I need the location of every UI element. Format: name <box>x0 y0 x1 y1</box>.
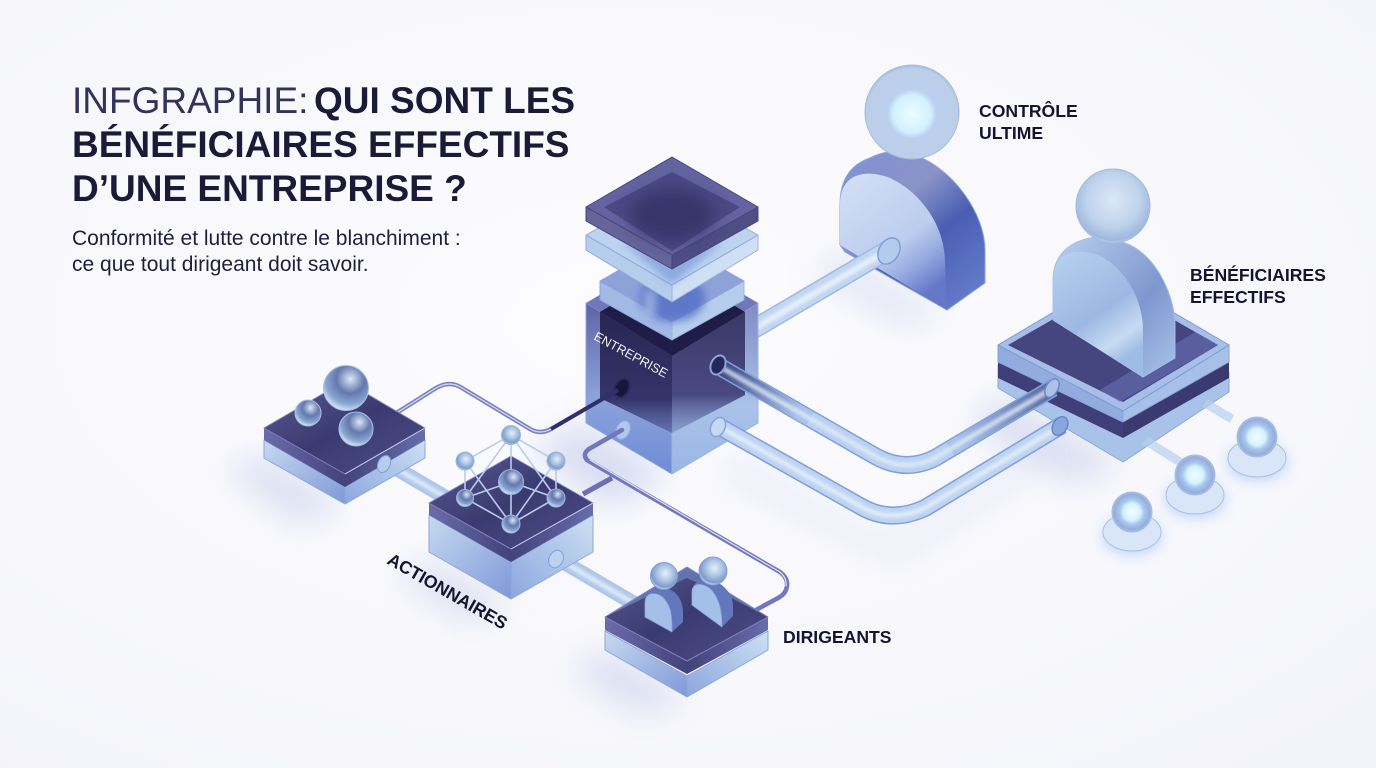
title: QUI SONT LES <box>314 80 575 121</box>
plate two <box>586 235 672 302</box>
title: BÉNÉFICIAIRES EFFECTIFS <box>72 124 569 165</box>
plate three <box>600 281 672 340</box>
body <box>1053 237 1175 377</box>
icon: ownership network <box>456 426 565 533</box>
label: contrôle ultime: ULTIME <box>979 123 1043 143</box>
dark core <box>600 312 672 433</box>
subtitle: ce que tout dirigeant doit savoir. <box>72 253 369 276</box>
connector: dirigeants lower pipe section <box>745 598 778 616</box>
figure: bénéficiaires effectifs person <box>1053 169 1175 377</box>
node: actionnaires left block <box>264 366 425 504</box>
subtitle: Conformité et lutte contre le blanchiment : <box>72 227 461 250</box>
label: contrôle ultime: CONTRÔLE <box>979 100 1078 121</box>
body <box>840 152 985 310</box>
socket <box>546 548 566 570</box>
connector: light tube left block to middle block <box>385 462 445 497</box>
glowing head <box>865 65 959 159</box>
label: dirigeants: DIRIGEANTS <box>783 627 892 647</box>
connector: light tube middle block to dirigeants block <box>560 560 635 604</box>
node: bénéficiaires effectifs platform <box>998 277 1229 462</box>
connector: middle block to cube short pipe <box>583 478 612 494</box>
cube glass sides <box>586 303 672 474</box>
icon: shareholder spheres <box>295 366 373 446</box>
connector: dark pipe into entreprise <box>551 390 618 429</box>
label: bénéficiaires effectifs: BÉNÉFICIAIRES <box>1190 264 1326 285</box>
sockets <box>611 376 633 400</box>
figure: contrôle ultime person <box>840 65 985 310</box>
node: entreprise stacked cube <box>586 157 758 474</box>
ground shadows <box>225 250 1123 715</box>
lid <box>586 207 672 269</box>
head <box>1076 169 1150 243</box>
title: D’UNE ENTREPRISE ? <box>72 168 467 209</box>
title: INFGRAPHIE: <box>72 80 319 121</box>
connector: entreprise to bénéficiaires tube upper <box>707 353 1062 465</box>
cube label: ENTREPRISE <box>592 328 671 381</box>
icon: glowing outcome nodes <box>1103 417 1286 552</box>
connector: dirigeants to entreprise thin pipe <box>585 430 787 598</box>
icon: two directors <box>645 557 733 632</box>
dark layer <box>998 362 1123 438</box>
connector: platform to outcome tubes <box>1145 403 1232 462</box>
connector: actionnaires to entreprise thin pipe <box>398 384 551 432</box>
socket <box>375 453 393 475</box>
lower glass <box>998 365 1229 462</box>
label: actionnaires: ACTIONNAIRES <box>384 549 511 633</box>
label: bénéficiaires effectifs: EFFECTIFS <box>1190 287 1286 307</box>
connector: entreprise to bénéficiaires tube lower <box>707 414 1071 516</box>
node: dirigeants block <box>605 557 768 697</box>
node: actionnaires middle block <box>429 426 593 599</box>
connector: contrôle ultime tube <box>752 234 905 330</box>
top plate <box>998 345 1123 422</box>
